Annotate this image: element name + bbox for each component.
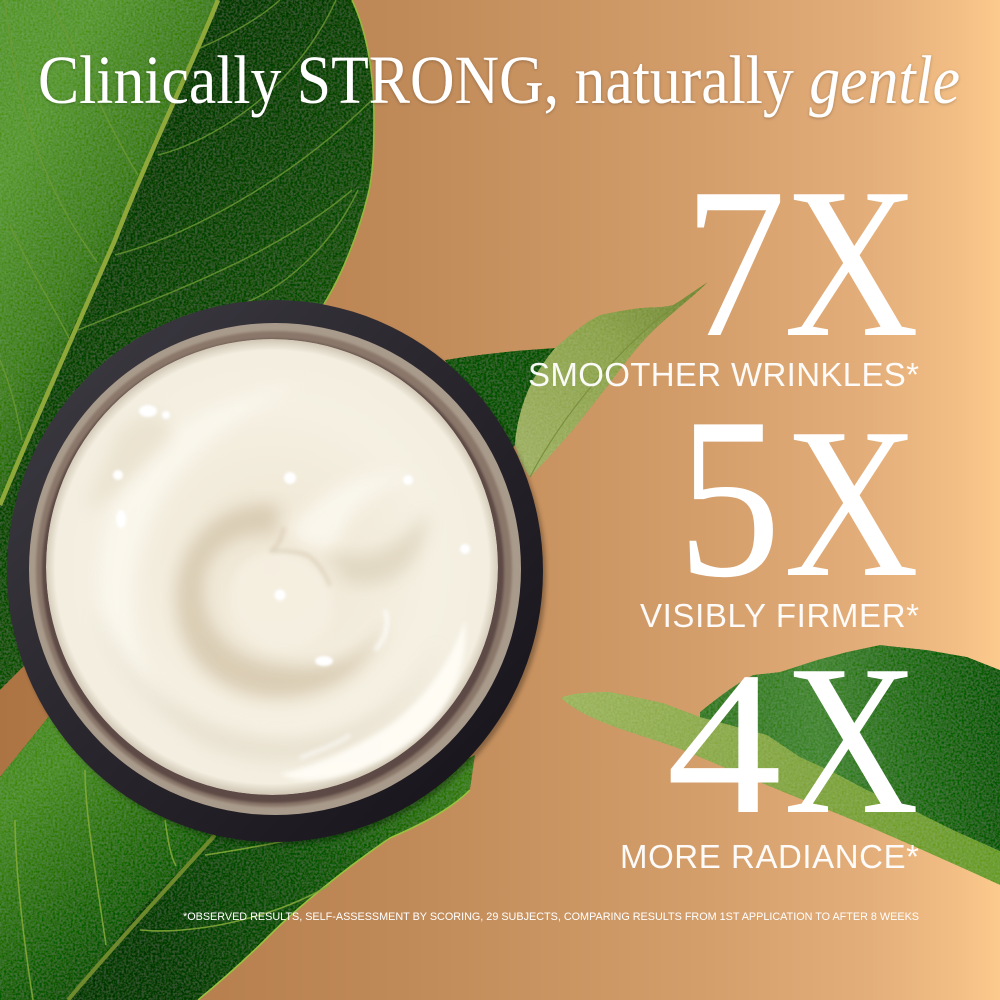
stat: 7X smoother wrinkles xyxy=(528,143,919,393)
stat: 4X more radiance xyxy=(620,620,919,875)
stat: 4X more radiance: X xyxy=(784,620,919,859)
leaf: right dark green xyxy=(700,645,1000,855)
stat: 5X visibly firmer xyxy=(640,371,919,634)
cream highlights xyxy=(139,405,157,417)
stat: 7X smoother wrinkles: X xyxy=(784,143,919,382)
jar inner ring xyxy=(29,323,521,815)
stat: 7X smoother wrinkles: SMOOTHER WRINKLES* xyxy=(528,356,919,393)
leaf: behind jar, light tip xyxy=(515,282,708,477)
stat: 7X smoother wrinkles: 7 xyxy=(684,144,786,382)
stat: 4X more radiance: MORE RADIANCE* xyxy=(620,838,919,875)
cream swirl mound xyxy=(234,553,328,636)
product jar xyxy=(7,300,546,845)
title: Clinically STRONG, naturally gentle xyxy=(38,42,960,118)
footnote: *OBSERVED RESULTS, SELF-ASSESSMENT BY SCORING, 29 SUBJECTS, COMPARING RESULTS FROM 1ST APPLICATION TO AFTER 8 WEEKS xyxy=(183,911,919,923)
jar shadow xyxy=(10,305,546,845)
leaf: right light underside xyxy=(561,692,1000,885)
jar outer rim xyxy=(7,300,543,842)
stat: 5X visibly firmer: 5 xyxy=(677,371,781,625)
stat: 4X more radiance: 4 xyxy=(666,630,782,857)
leaf: bottom left xyxy=(0,715,475,1000)
leaf: top left xyxy=(0,0,374,690)
cream swirl creases xyxy=(270,527,330,586)
stat: 5X visibly firmer: VISIBLY FIRMER* xyxy=(640,597,919,634)
stat: 5X visibly firmer: X xyxy=(784,383,919,622)
leaf: behind jar, dark xyxy=(445,348,556,470)
cream xyxy=(46,339,498,795)
